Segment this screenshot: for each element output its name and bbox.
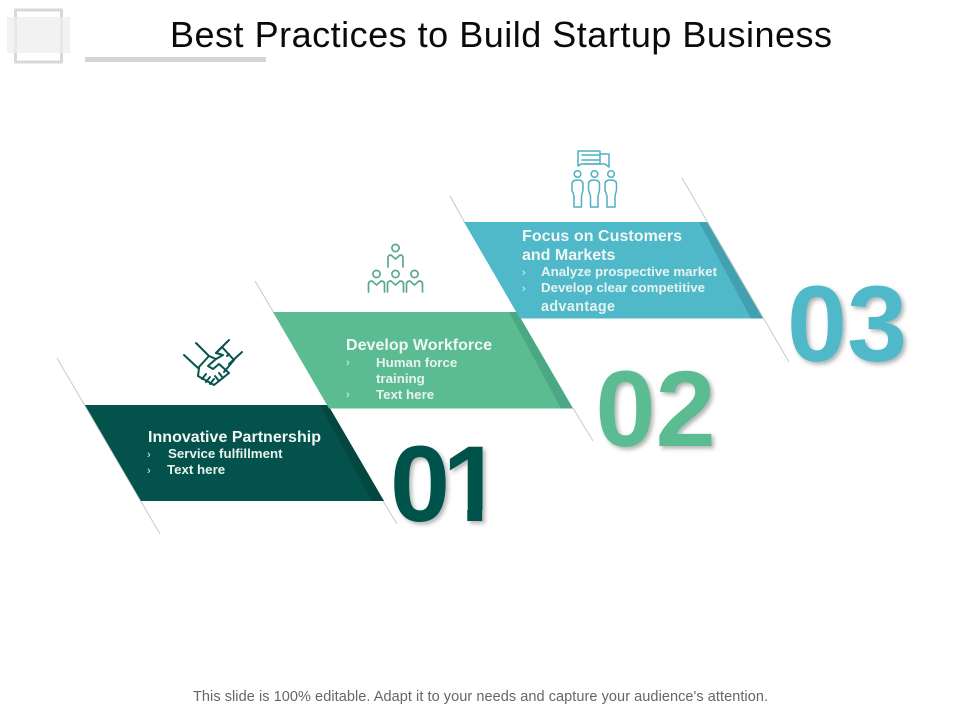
panel: step 01 (57, 358, 397, 534)
panel: step 01: › (147, 449, 151, 461)
number 02: 02 (596, 348, 716, 469)
panel: step 03: and Markets (522, 247, 615, 264)
number 01: 0 (390, 423, 450, 544)
panel: step 02: training (376, 371, 425, 386)
panel: step 02: Develop Workforce (346, 337, 492, 354)
panel: step 03 (450, 178, 789, 362)
panel: step 02 (255, 281, 593, 441)
panel: step 02: Text here (376, 387, 434, 402)
icon: team pyramid (368, 244, 422, 292)
number 01 (394, 446, 488, 527)
panel: step 03: › (522, 267, 526, 279)
number 03: 03 (787, 263, 907, 384)
panel: step 02: › (346, 357, 350, 369)
panel: step 03: Analyze prospective market (541, 264, 718, 279)
panel: step 03: Focus on Customers (522, 228, 682, 245)
panel: step 03: advantage (541, 299, 615, 315)
panel: step 03: Develop clear competitive (541, 280, 705, 295)
icon: customers with speech bubbles (572, 151, 616, 207)
title: Best Practices to Build Startup Business (170, 14, 832, 55)
footer note: This slide is 100% editable. Adapt it to your needs and capture your audience's attention. (193, 689, 768, 705)
panel: step 01: Text here (167, 462, 225, 477)
panel: step 01: Innovative Partnership (148, 429, 321, 446)
number 01: 1 (442, 423, 503, 544)
panel: step 01: › (147, 465, 151, 477)
header decoration (7, 10, 266, 62)
panel: step 03: › (522, 283, 526, 295)
panel: step 02: › (346, 389, 350, 401)
panel: step 01: Service fulfillment (168, 446, 283, 461)
icon: handshake (184, 340, 242, 385)
panel: step 02: Human force (376, 355, 457, 370)
